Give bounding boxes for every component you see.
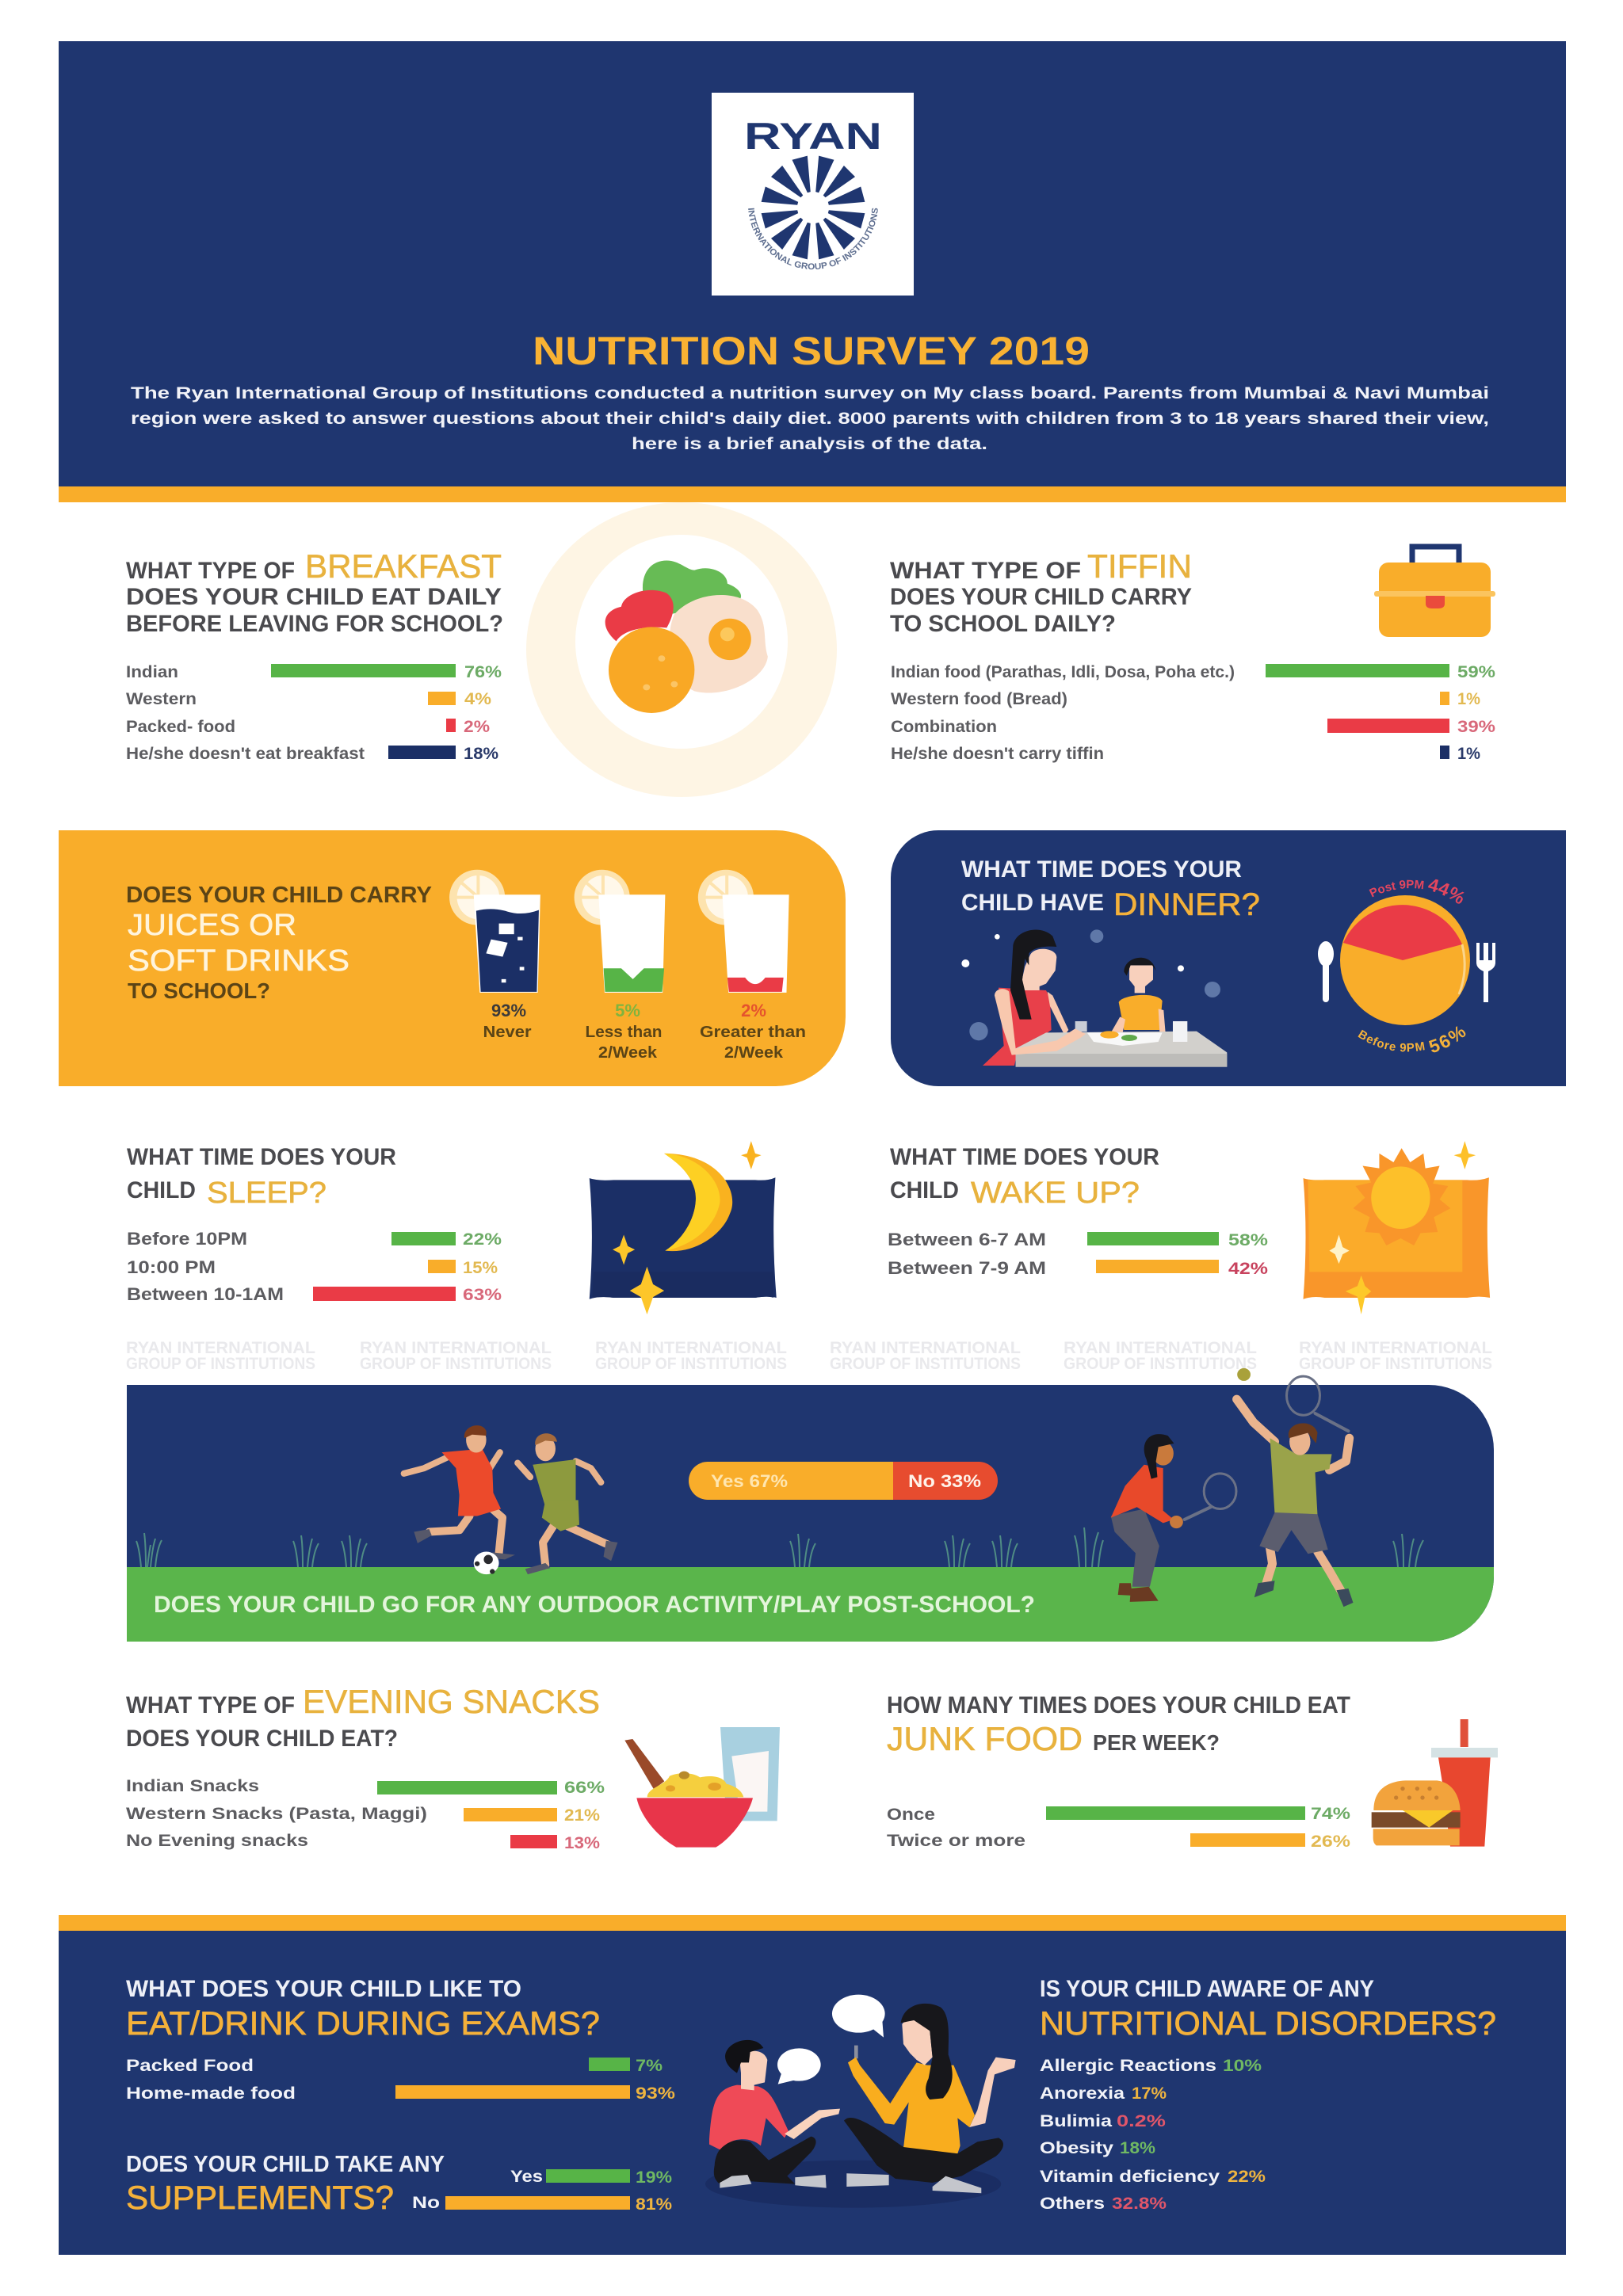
list: nutritional disorders: 0.2% xyxy=(1117,2112,1166,2130)
bar chart: supplements: No xyxy=(412,2194,440,2212)
bar chart: sleep: Between 10-1AM xyxy=(127,1284,284,1304)
bar chart: evening snacks: 66% xyxy=(564,1779,605,1797)
bar chart: breakfast xyxy=(126,663,502,763)
icon: breakfast plate xyxy=(526,502,837,797)
panel: bottom banner xyxy=(59,1915,1566,2255)
intro paragraph: region were asked to answer questions about their child's daily diet. 8000 parents with children from 3 to 18 years shared their view, xyxy=(131,410,1489,428)
heading: junk food: JUNK FOOD xyxy=(887,1720,1083,1757)
panel: breakfast xyxy=(126,502,837,797)
bar chart: breakfast: 4% xyxy=(464,690,491,708)
title: NUTRITION SURVEY 2019 xyxy=(533,329,1090,373)
heading: breakfast: BEFORE LEAVING FOR SCHOOL? xyxy=(126,611,503,637)
heading: exams xyxy=(126,1976,600,2042)
chart: dinner time plate: Post 9PM 44% xyxy=(1369,879,1465,904)
heading: wake up: WAKE UP? xyxy=(971,1177,1140,1210)
bar chart: tiffin: 1% xyxy=(1457,745,1480,763)
list: nutritional disorders: Anorexia xyxy=(1040,2084,1125,2103)
intro paragraph: The Ryan International Group of Institutions conducted a nutrition survey on My class board. Parents from Mumbai & Navi Mumbai xyxy=(131,384,1489,402)
watermark strip: GROUP OF INSTITUTIONS xyxy=(126,1355,315,1373)
bar chart: tiffin: Combination xyxy=(891,718,997,736)
logo: RYAN xyxy=(744,115,882,157)
glass labels: 93% xyxy=(491,1001,526,1020)
bar chart: tiffin: Western food (Bread) xyxy=(891,690,1067,708)
heading: juices xyxy=(126,883,432,1003)
heading: nutritional disorders: NUTRITIONAL DISORDERS? xyxy=(1040,2004,1496,2042)
heading: evening snacks xyxy=(126,1683,600,1752)
bar chart: wake up: 42% xyxy=(1228,1260,1268,1278)
glass labels: 2% xyxy=(741,1001,766,1020)
heading: wake up: WHAT TIME DOES YOUR xyxy=(890,1144,1159,1170)
bar chart: sleep: 10:00 PM xyxy=(127,1257,216,1277)
heading: junk food: HOW MANY TIMES DOES YOUR CHILD EAT xyxy=(887,1692,1350,1718)
heading: evening snacks: EVENING SNACKS xyxy=(303,1683,600,1720)
glass labels: Never xyxy=(483,1024,532,1041)
bar chart: exams: Home-made food xyxy=(126,2084,296,2103)
panel: sleep xyxy=(127,1141,777,1314)
heading: junk food: PER WEEK? xyxy=(1093,1730,1220,1755)
panel: outdoor activity xyxy=(127,1368,1494,1642)
heading: breakfast xyxy=(126,547,503,637)
bar chart: evening snacks: Western Snacks (Pasta, Maggi) xyxy=(126,1805,427,1823)
bar chart: supplements: Yes xyxy=(510,2168,543,2186)
heading: tiffin: TO SCHOOL DAILY? xyxy=(890,611,1116,637)
grass tufts xyxy=(136,1527,1423,1567)
heading: juices: JUICES OR xyxy=(128,909,296,942)
icon: glass less than 2/week xyxy=(575,870,665,993)
bar chart: breakfast: Packed- food xyxy=(126,718,235,736)
watermark strip: GROUP OF INSTITUTIONS xyxy=(360,1355,552,1373)
glass labels: Less than xyxy=(585,1024,663,1041)
illustration: children playing tennis xyxy=(1111,1368,1353,1607)
list: nutritional disorders xyxy=(1040,2057,1266,2213)
heading: breakfast: BREAKFAST xyxy=(305,547,502,585)
bar chart: sleep: Before 10PM xyxy=(127,1229,247,1249)
heading: nutritional disorders: IS YOUR CHILD AWARE OF ANY xyxy=(1040,1976,1374,2002)
list: nutritional disorders: 10% xyxy=(1223,2057,1262,2075)
heading: evening snacks: WHAT TYPE OF xyxy=(126,1692,295,1718)
glass labels xyxy=(483,1001,806,1062)
icon: glass never xyxy=(449,870,540,993)
heading: breakfast: DOES YOUR CHILD EAT DAILY xyxy=(126,584,502,610)
bar chart: exams: 93% xyxy=(636,2084,675,2103)
bar chart: exams: Packed Food xyxy=(126,2057,254,2075)
intro paragraph xyxy=(131,384,1489,453)
panel: junk food xyxy=(887,1692,1498,1851)
bar chart: evening snacks: No Evening snacks xyxy=(126,1832,308,1850)
heading: sleep: CHILD xyxy=(127,1177,196,1203)
logo xyxy=(712,93,914,296)
heading: nutritional disorders xyxy=(1040,1976,1496,2042)
watermark strip: RYAN INTERNATIONAL xyxy=(1299,1339,1492,1357)
heading: sleep: WHAT TIME DOES YOUR xyxy=(127,1144,396,1170)
watermark strip: GROUP OF INSTITUTIONS xyxy=(1299,1355,1492,1373)
stacked bar: yes or no: No 33% xyxy=(908,1471,981,1491)
heading: tiffin: WHAT TYPE OF xyxy=(890,558,1081,584)
glass labels: 5% xyxy=(615,1001,640,1020)
bar chart: junk food: Twice or more xyxy=(887,1832,1025,1850)
bar chart: tiffin: 1% xyxy=(1457,690,1480,708)
illustration: mother and child talking xyxy=(705,1995,1016,2208)
question: outdoor activity: DOES YOUR CHILD GO FOR ANY OUTDOOR ACTIVITY/PLAY POST-SCHOOL? xyxy=(154,1592,1035,1618)
heading: dinner xyxy=(961,856,1260,922)
list: nutritional disorders: Bulimia xyxy=(1040,2112,1112,2130)
panel: juices or soft drinks xyxy=(59,830,846,1086)
heading: juices: SOFT DRINKS xyxy=(128,944,349,978)
watermark strip: RYAN INTERNATIONAL xyxy=(1064,1339,1257,1357)
bar chart: tiffin: He/she doesn't carry tiffin xyxy=(891,745,1104,763)
watermark strip: RYAN INTERNATIONAL xyxy=(595,1339,787,1357)
list: nutritional disorders: 18% xyxy=(1120,2139,1155,2157)
heading: evening snacks: DOES YOUR CHILD EAT? xyxy=(126,1726,398,1752)
heading: tiffin xyxy=(890,547,1192,637)
stacked bar: yes or no xyxy=(689,1462,998,1500)
intro paragraph: here is a brief analysis of the data. xyxy=(632,435,987,453)
chart: dinner time plate: Before 9PM 56% xyxy=(1358,1026,1466,1052)
heading: juices: TO SCHOOL? xyxy=(128,978,270,1003)
bar chart: breakfast: He/she doesn't eat breakfast xyxy=(126,745,365,763)
bar chart: tiffin: 59% xyxy=(1457,663,1495,681)
bar chart: tiffin: Indian food (Parathas, Idli, Dosa, Poha etc.) xyxy=(891,663,1235,681)
panel: dinner xyxy=(891,830,1566,1086)
watermark strip: GROUP OF INSTITUTIONS xyxy=(1064,1355,1257,1373)
bar chart: junk food xyxy=(887,1805,1350,1851)
illustration: mother and child at table xyxy=(961,929,1227,1067)
bar chart: evening snacks: 13% xyxy=(564,1834,600,1852)
heading: breakfast: WHAT TYPE OF xyxy=(126,558,295,584)
glass labels: 2/Week xyxy=(724,1044,784,1062)
glass labels: 2/Week xyxy=(598,1044,658,1062)
panel: tiffin xyxy=(890,547,1495,763)
heading: supplements: DOES YOUR CHILD TAKE ANY xyxy=(126,2152,445,2177)
heading: dinner: DINNER? xyxy=(1113,887,1260,922)
bar chart: breakfast: Indian xyxy=(126,663,178,681)
bar chart: junk food: Once xyxy=(887,1806,935,1824)
bar chart: evening snacks: 21% xyxy=(564,1806,600,1825)
bar chart: supplements: 81% xyxy=(636,2195,672,2214)
bar chart: sleep xyxy=(127,1229,502,1304)
heading: sleep xyxy=(127,1144,396,1210)
list: nutritional disorders: Others xyxy=(1040,2195,1105,2213)
panel: header xyxy=(59,41,1566,502)
icon: snack bowl and milk xyxy=(624,1727,780,1848)
bar chart: tiffin: 39% xyxy=(1457,718,1495,736)
chart: dinner time plate xyxy=(1318,879,1495,1052)
icon: pillow with moon xyxy=(590,1141,777,1314)
bar chart: tiffin xyxy=(891,663,1495,763)
bar chart: sleep: 15% xyxy=(463,1259,498,1277)
heading: tiffin: TIFFIN xyxy=(1087,547,1192,585)
icon: pillow with sun xyxy=(1304,1141,1490,1314)
bar chart: breakfast: Western xyxy=(126,690,197,708)
watermark strip: RYAN INTERNATIONAL xyxy=(126,1339,315,1357)
heading: wake up: CHILD xyxy=(890,1177,959,1203)
bar chart: breakfast: 18% xyxy=(464,745,498,763)
icon: glass greater than 2/week xyxy=(698,870,789,993)
bar chart: evening snacks: Indian Snacks xyxy=(126,1777,259,1795)
bar chart: wake up xyxy=(888,1230,1268,1278)
bar chart: wake up: Between 7-9 AM xyxy=(888,1258,1046,1278)
heading: wake up xyxy=(890,1144,1159,1210)
icon: tiffin box xyxy=(1374,547,1495,637)
illustration: children playing football xyxy=(404,1425,617,1574)
heading: tiffin: DOES YOUR CHILD CARRY xyxy=(890,584,1192,610)
bar chart: sleep: 63% xyxy=(463,1286,502,1304)
watermark strip xyxy=(126,1339,1492,1373)
bar chart: junk food: 74% xyxy=(1311,1805,1350,1823)
heading: exams: WHAT DOES YOUR CHILD LIKE TO xyxy=(126,1976,521,2002)
bar chart: supplements: 19% xyxy=(636,2168,672,2187)
bar chart: wake up: Between 6-7 AM xyxy=(888,1230,1046,1249)
list: nutritional disorders: 22% xyxy=(1228,2168,1266,2186)
bar chart: exams xyxy=(126,2057,675,2103)
watermark strip: GROUP OF INSTITUTIONS xyxy=(595,1355,787,1373)
heading: dinner: CHILD HAVE xyxy=(961,890,1104,916)
list: nutritional disorders: Allergic Reactions xyxy=(1040,2057,1216,2075)
glass labels: Greater than xyxy=(700,1024,806,1041)
heading: supplements: SUPPLEMENTS? xyxy=(126,2179,394,2216)
heading: juices: DOES YOUR CHILD CARRY xyxy=(126,883,432,908)
bar chart: wake up: 58% xyxy=(1228,1231,1268,1249)
watermark strip: RYAN INTERNATIONAL xyxy=(360,1339,552,1357)
heading: sleep: SLEEP? xyxy=(207,1177,327,1210)
watermark strip: GROUP OF INSTITUTIONS xyxy=(830,1355,1021,1373)
bar chart: evening snacks xyxy=(126,1777,605,1852)
heading: dinner: WHAT TIME DOES YOUR xyxy=(961,856,1242,883)
bar chart: junk food: 26% xyxy=(1311,1833,1350,1851)
stacked bar: yes or no: Yes 67% xyxy=(711,1471,788,1491)
bar chart: breakfast: 76% xyxy=(464,663,502,681)
heading: exams: EAT/DRINK DURING EXAMS? xyxy=(126,2004,600,2042)
list: nutritional disorders: 32.8% xyxy=(1112,2195,1167,2213)
list: nutritional disorders: Vitamin deficiency xyxy=(1040,2168,1220,2186)
panel: wake up xyxy=(888,1141,1490,1314)
bar chart: sleep: 22% xyxy=(463,1230,502,1249)
heading: junk food xyxy=(887,1692,1350,1757)
panel: evening snacks xyxy=(126,1683,780,1852)
heading: supplements xyxy=(126,2152,445,2216)
bar chart: breakfast: 2% xyxy=(464,718,490,736)
logo: INTERNATIONAL GROUP OF INSTITUTIONS xyxy=(748,208,878,269)
list: nutritional disorders: 17% xyxy=(1132,2084,1167,2103)
watermark strip: RYAN INTERNATIONAL xyxy=(830,1339,1021,1357)
bar chart: exams: 7% xyxy=(636,2057,663,2075)
list: nutritional disorders: Obesity xyxy=(1040,2139,1113,2157)
bar chart: supplements xyxy=(412,2168,672,2214)
icon: burger and soda xyxy=(1372,1719,1498,1847)
